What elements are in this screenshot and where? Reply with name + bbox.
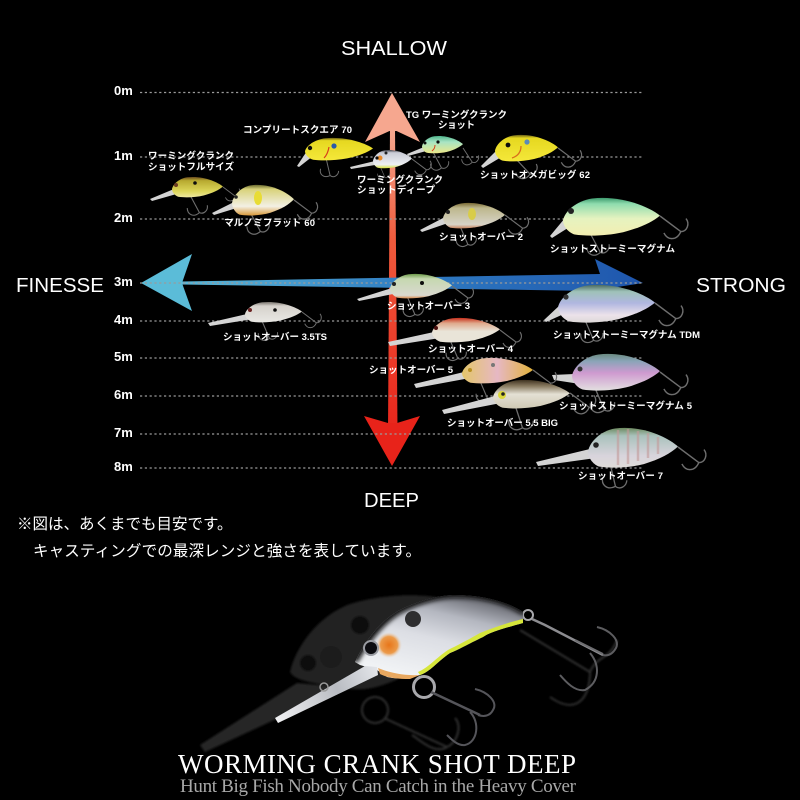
heading: deep: DEEP (364, 489, 419, 512)
lure: shot over 3.5TS (208, 302, 321, 345)
lure name labels (148, 109, 700, 482)
lure name labels: ショットオーバー 3 (387, 301, 470, 312)
lure name labels: ショットストーミーマグナム TDM (553, 329, 700, 341)
depth scale labels: 3m (114, 274, 133, 289)
lure: worming crank shot full size (150, 177, 240, 220)
lure: shot stormy magnum (550, 198, 688, 260)
lure name labels: ワーミングクランク (357, 174, 443, 186)
depth scale labels (114, 83, 133, 474)
lure name labels: ショットストーミーマグナム 5 (559, 400, 693, 412)
lure name labels: ワーミングクランク (148, 150, 234, 162)
depth scale labels: 5m (114, 349, 133, 364)
lure: shot over 4 (388, 318, 521, 366)
lure: worming crank shot deep small (350, 150, 431, 181)
lure: complete square 70 (297, 138, 373, 182)
depth scale labels: 7m (114, 425, 133, 440)
lure name labels: ショットオーバー 7 (578, 471, 663, 482)
lure name labels: ショットオーバー 5 (369, 365, 454, 376)
depth scale labels: 4m (114, 312, 133, 327)
arrow: vertical depth axis (364, 93, 420, 466)
lure name labels: ショットオーバー 4 (428, 344, 514, 355)
depth scale labels: 6m (114, 387, 133, 402)
lure name labels: コンプリートスクエア 70 (243, 125, 352, 136)
lure name labels: ショットオーバー 5.5 BIG (447, 418, 558, 429)
note text: キャスティングでの最深レンジと強さを表しています。 (33, 542, 421, 560)
lure name labels: ショットオーバー 3.5TS (223, 332, 327, 343)
lure: shot over 5 (414, 358, 557, 407)
heading: finesse: FINESSE (16, 274, 104, 297)
lure name labels: ショットディープ (357, 184, 435, 196)
depth scale labels: 8m (114, 459, 133, 474)
heading: shallow: SHALLOW (341, 37, 448, 60)
hero lure: main body, lip and hooks (275, 592, 617, 745)
lure: shot omega big 62 (481, 135, 582, 181)
note text (17, 515, 421, 560)
depth scale labels: 1m (114, 148, 133, 163)
depth scale labels: 2m (114, 210, 133, 225)
hero lure: ghost image (200, 595, 617, 752)
lure: shot stormy magnum 5 (552, 354, 688, 419)
lure name labels: ショットストーミーマグナム (550, 243, 675, 255)
arrow: horizontal strength axis (141, 254, 643, 311)
lure name labels: ショット (438, 120, 475, 131)
lure: shot over 3 (357, 274, 473, 322)
title: WORMING CRANK SHOT DEEP (178, 749, 576, 779)
heading: strong: STRONG (696, 274, 786, 297)
depth scale labels: 0m (114, 83, 133, 98)
lure: shot stormy magnum TDM (544, 285, 683, 348)
note text: ※図は、あくまでも目安です。 (17, 515, 232, 533)
lure name labels: ショットオメガビッグ 62 (480, 169, 590, 181)
lure name labels: ショットオーバー 2 (439, 232, 523, 243)
lure: shot over 5.5 BIG (442, 380, 596, 437)
lure name labels: ショットフルサイズ (148, 161, 234, 173)
lure name labels: TG ワーミングクランク (406, 109, 507, 121)
subtitle: Hunt Big Fish Nobody Can Catch in the Heavy Cover (180, 776, 577, 797)
lure: shot over 2 (420, 203, 529, 252)
lure: TG worming crank shot (407, 136, 480, 174)
lure: shot over 7 (536, 428, 706, 495)
lure: marunomi flat 60 (212, 185, 318, 239)
lure name labels: マルノミフラット 60 (224, 218, 315, 229)
